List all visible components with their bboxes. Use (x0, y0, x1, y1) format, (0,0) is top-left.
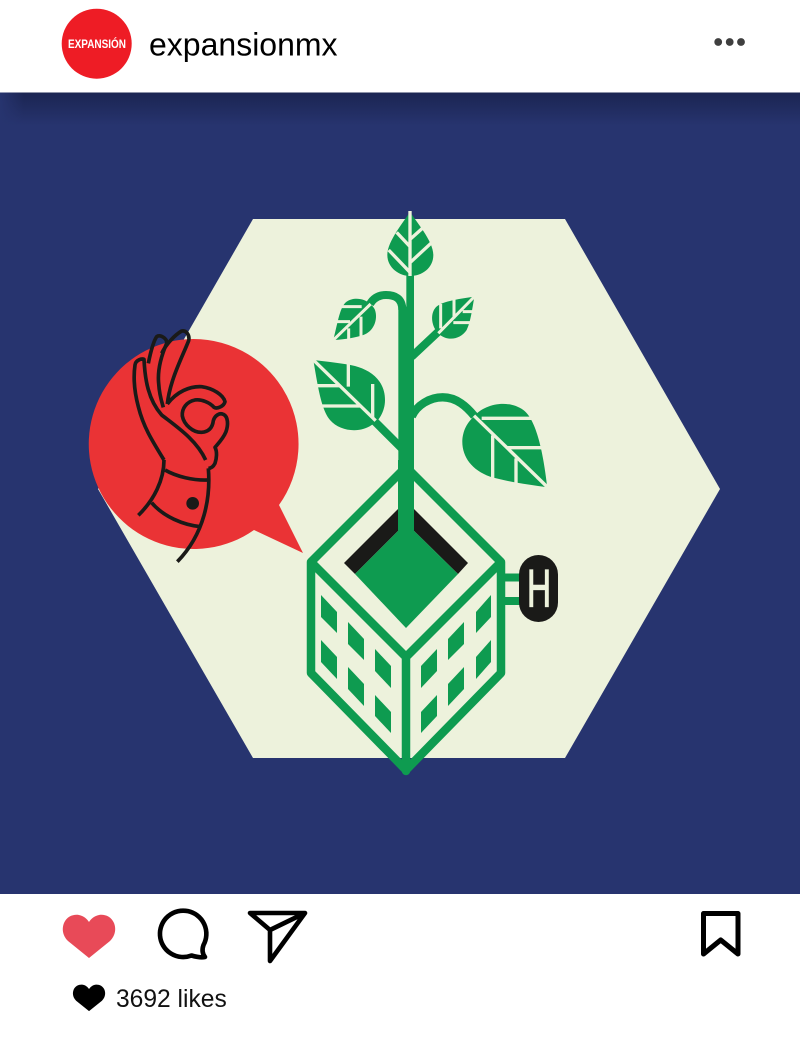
logo: Expansion red circle (62, 9, 132, 79)
hotel sign H: H (527, 560, 551, 618)
icon: more options dots (714, 38, 745, 46)
windows: left face (321, 595, 391, 733)
plant (313, 211, 548, 500)
leaf: big right (462, 404, 548, 488)
hotel sign H (519, 555, 558, 622)
likes text: 3692 likes (116, 986, 227, 1013)
stem base (398, 460, 414, 532)
windows: right face (421, 595, 491, 733)
logo: Expansion red circle: EXPANSIÓN (68, 38, 126, 51)
icon: bookmark (704, 914, 738, 954)
icon: hotel building (311, 460, 558, 771)
speech bubble (89, 339, 303, 553)
account name: expansionmx (149, 26, 338, 62)
icon: send arrow (250, 913, 305, 961)
leaf: big left (313, 359, 385, 430)
likes count (73, 985, 227, 1013)
icon: small heart (73, 985, 105, 1011)
branches and stem (370, 275, 474, 500)
panel: navy image background (0, 92, 800, 894)
icon: comment bubble (160, 911, 206, 957)
leaf: top (387, 211, 433, 276)
header bar (62, 9, 745, 79)
leaf: small left (333, 299, 376, 341)
hexagon background (98, 219, 720, 758)
building outline (311, 467, 501, 771)
speech bubble with hand (89, 331, 303, 562)
illustration: plant growing from building (311, 211, 558, 771)
hotel sign connectors (503, 578, 522, 601)
icon: OK hand gesture (134, 331, 228, 562)
icon: like heart (63, 915, 115, 958)
soil opening (344, 501, 468, 628)
leaf: small right (432, 296, 475, 339)
action bar (63, 911, 738, 961)
